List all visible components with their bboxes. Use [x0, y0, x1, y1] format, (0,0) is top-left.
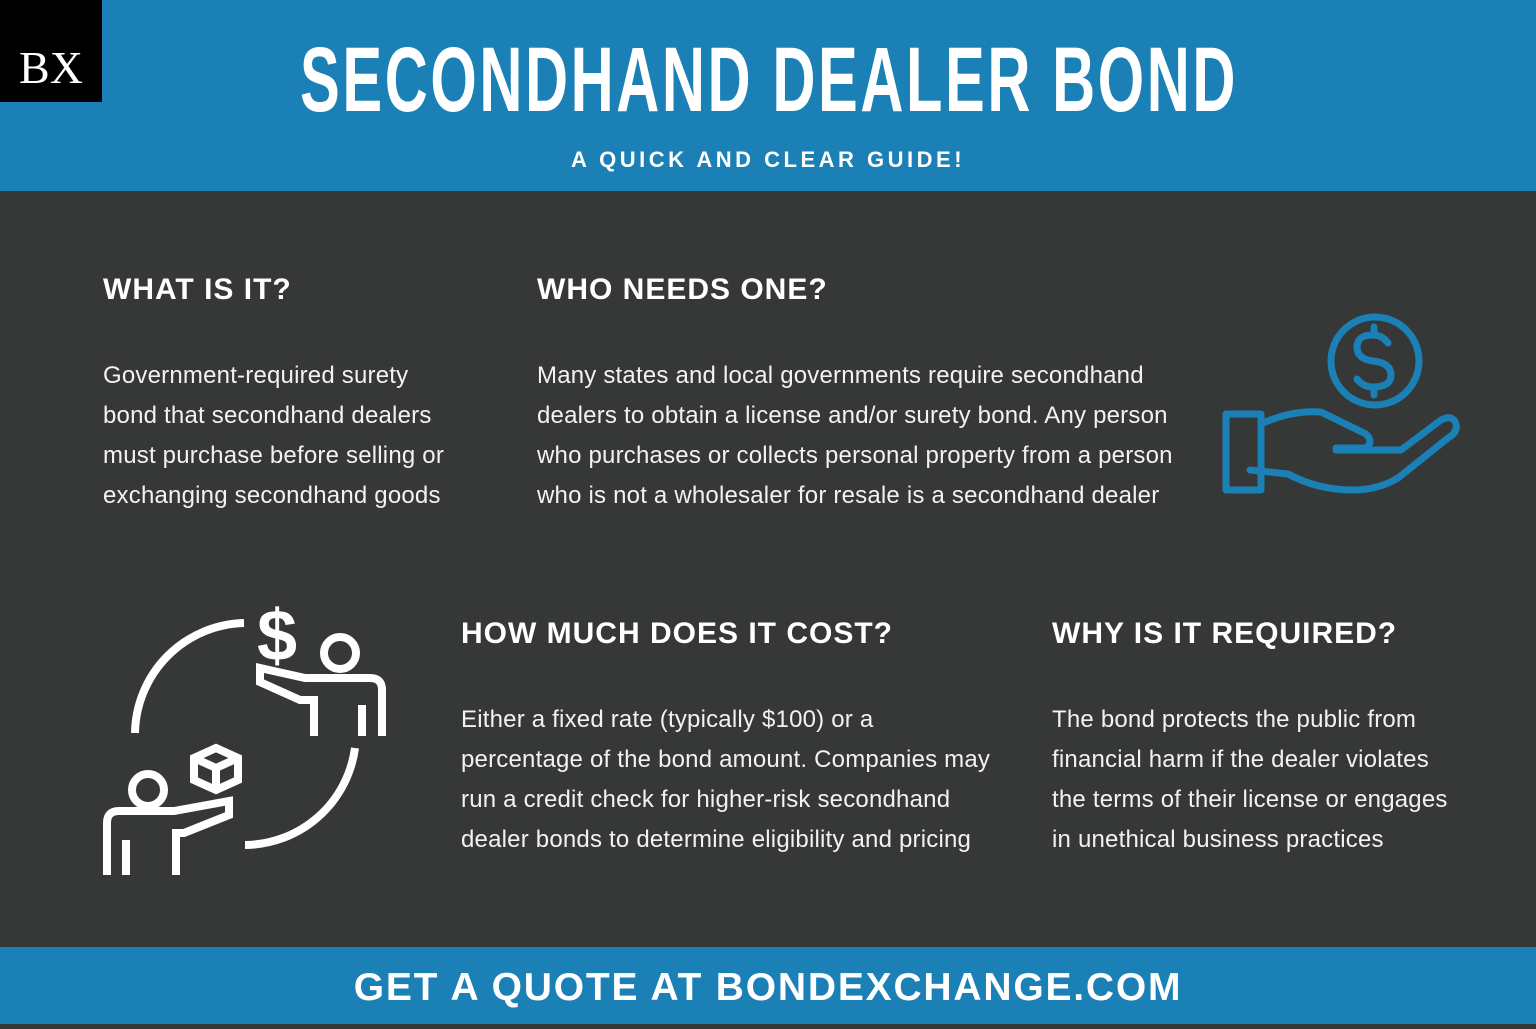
subtitle: A QUICK AND CLEAR GUIDE! [571, 147, 965, 172]
panel: what is it [103, 273, 444, 509]
panel: who needs one [537, 273, 1173, 509]
panel: why is it required [1052, 617, 1448, 853]
text block: financial harm if the dealer violates [1052, 746, 1429, 773]
logo BX [0, 0, 102, 102]
logo BX: BX [19, 42, 83, 93]
text block: who is not a wholesaler for resale is a secondhand dealer [537, 482, 1159, 509]
text block: Government-required surety [103, 362, 408, 389]
text block: must purchase before selling or [103, 442, 444, 469]
text block: exchanging secondhand goods [103, 482, 441, 509]
text block [103, 362, 444, 509]
heading: WHY IS IT REQUIRED? [1052, 617, 1397, 650]
header band [0, 0, 1536, 191]
heading: HOW MUCH DOES IT COST? [461, 617, 893, 650]
panel: how much does it cost [461, 617, 990, 853]
icon: exchange between people [103, 596, 386, 875]
text block [1052, 706, 1448, 853]
text block [537, 362, 1173, 509]
footer band: GET A QUOTE AT BONDEXCHANGE.COM [354, 966, 1182, 1009]
text block: who purchases or collects personal property from a person [537, 442, 1173, 469]
text block: Either a fixed rate (typically $100) or a [461, 706, 873, 733]
heading: WHO NEEDS ONE? [537, 273, 828, 306]
icon: exchange between people: $ [257, 596, 297, 676]
text block: dealers to obtain a license and/or surety bond. Any person [537, 402, 1168, 429]
text block: The bond protects the public from [1052, 706, 1416, 733]
text block: dealer bonds to determine eligibility and pricing [461, 826, 971, 853]
text block: percentage of the bond amount. Companies may [461, 746, 990, 773]
text block: Many states and local governments require secondhand [537, 362, 1144, 389]
text block: run a credit check for higher-risk secondhand [461, 786, 950, 813]
text block [461, 706, 990, 853]
text block: bond that secondhand dealers [103, 402, 432, 429]
footer band [0, 947, 1536, 1024]
icon: hand with dollar coin [1222, 314, 1460, 494]
title: SECONDHAND DEALER BOND [300, 29, 1238, 131]
text block: in unethical business practices [1052, 826, 1384, 853]
text block: the terms of their license or engages [1052, 786, 1448, 813]
heading: WHAT IS IT? [103, 273, 292, 306]
